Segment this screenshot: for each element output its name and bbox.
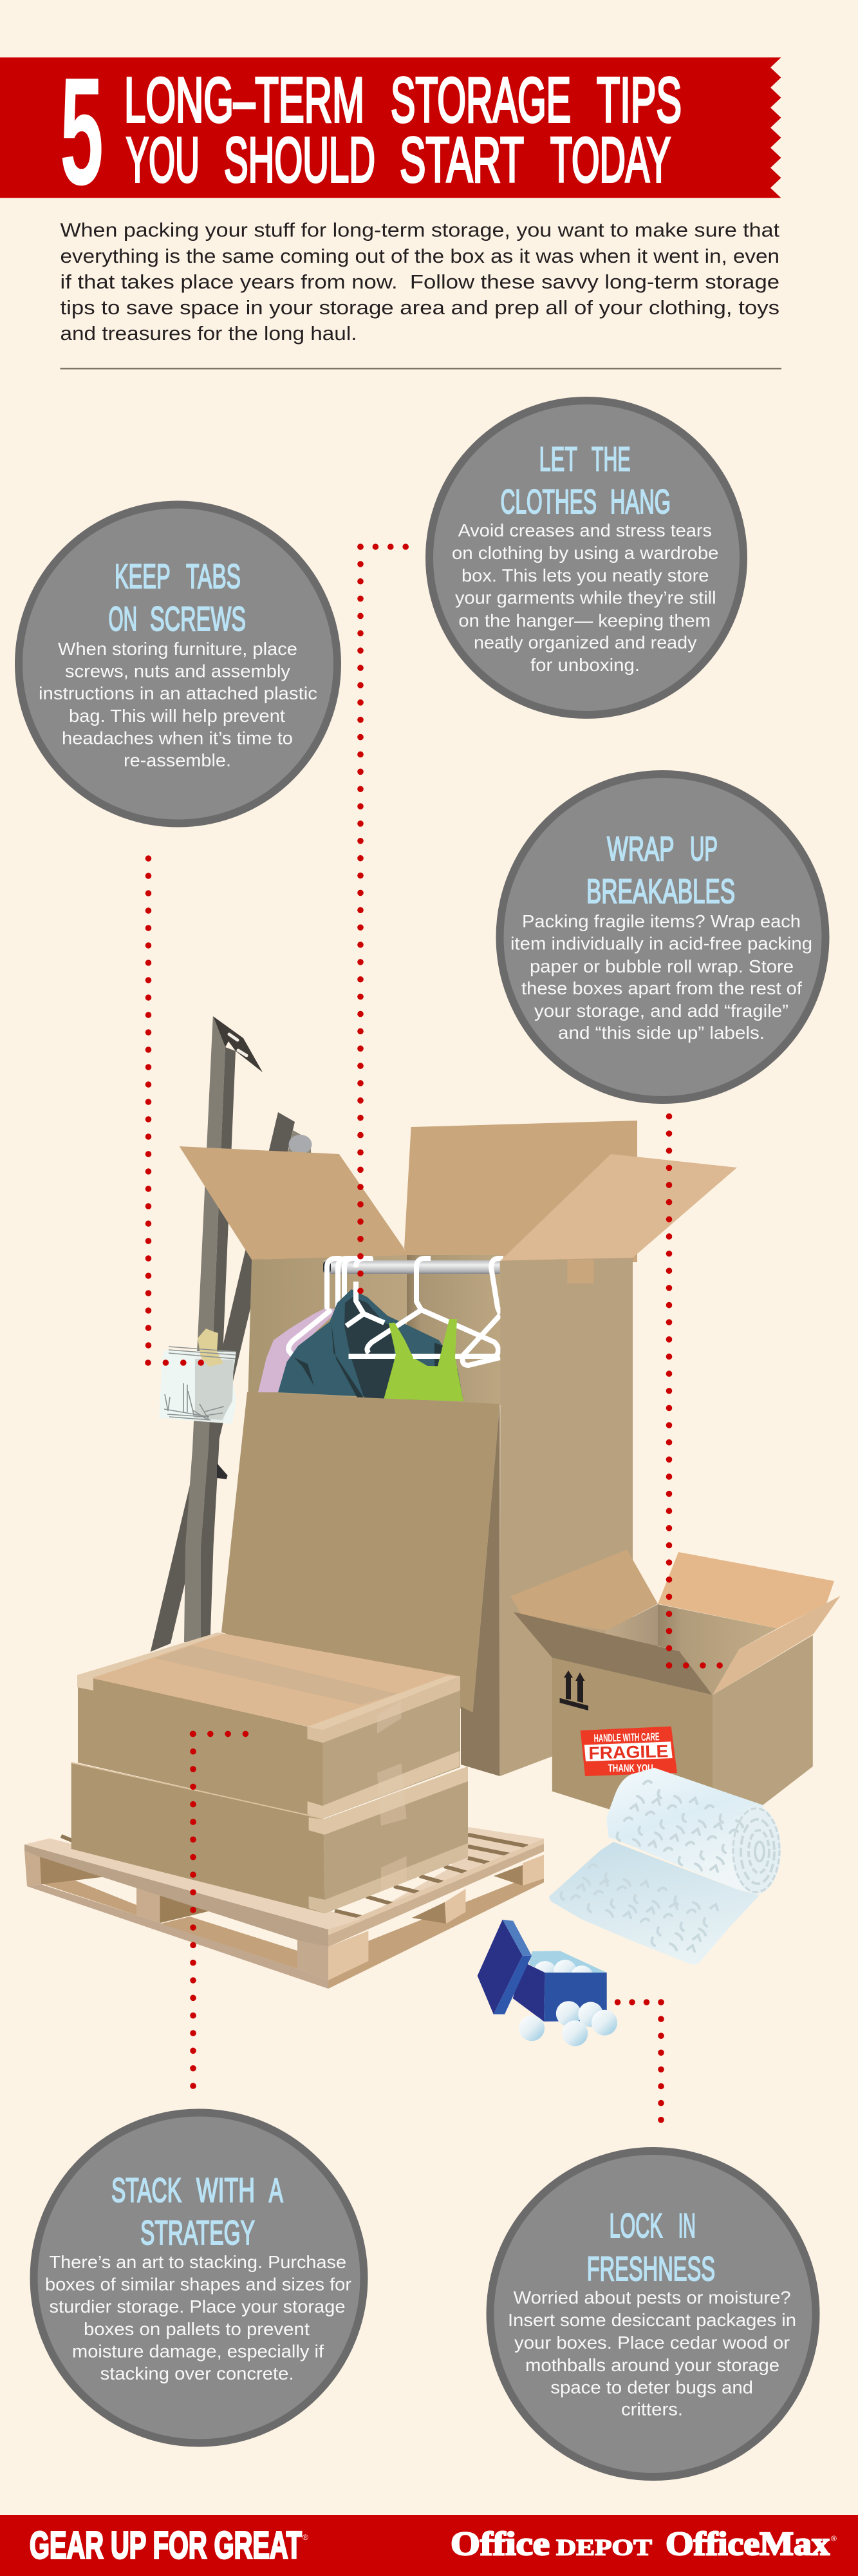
dotted connector: keep tabs to screws bag <box>148 858 201 1363</box>
upper box top face <box>78 1633 460 1730</box>
heading: wrap up breakables <box>586 830 735 911</box>
dotted connector: stacking to boxes <box>193 1734 246 2087</box>
body: let the clothes hang: for unboxing. <box>530 655 640 675</box>
deck grooves <box>61 1835 528 1918</box>
tagline: GEAR UP FOR GREAT <box>30 2524 302 2567</box>
left back flap <box>510 1549 658 1631</box>
heading: wrap up breakables: UP <box>690 830 718 868</box>
body: stack with a strategy: boxes of similar shapes and sizes for <box>45 2275 351 2294</box>
jacket shadow folds <box>294 1323 444 1399</box>
box left face <box>513 1962 545 2022</box>
heading: let the clothes hang: HANG <box>610 483 671 521</box>
vertical side tape <box>377 1701 407 1891</box>
heading: wrap up breakables: WRAP <box>607 830 675 868</box>
top right edge tape <box>308 1676 460 1730</box>
body: lock in freshness: critters. <box>621 2400 683 2419</box>
heading: keep tabs on screws: ON <box>108 600 137 638</box>
clothes rail <box>323 1260 500 1274</box>
lower box top tape <box>309 1766 468 1835</box>
panel: wrap up breakables <box>499 774 825 1100</box>
blocks <box>24 1851 41 1886</box>
loose mothballs <box>519 2001 617 2046</box>
upper box lower tape <box>308 1751 460 1819</box>
body: lock in freshness <box>508 2287 796 2419</box>
front hanger bar over top <box>413 1354 439 1359</box>
tagline registered mark: ® <box>303 2533 308 2542</box>
intro paragraph: and treasures for the long haul. <box>61 322 357 345</box>
teal jacket <box>278 1289 463 1401</box>
top plank surface <box>24 1838 360 1929</box>
lower box front <box>71 1763 325 1913</box>
tape piece <box>198 1329 223 1367</box>
heading: stack with a strategy: STRATEGY <box>140 2214 255 2252</box>
bubble pattern on sheet <box>561 1864 718 1951</box>
unrolled sheet <box>549 1842 760 1965</box>
body: wrap up breakables: your storage, and add “fragile” <box>534 1001 788 1021</box>
roll end spiral <box>733 1808 779 1892</box>
bag shaded side <box>195 1359 234 1420</box>
right plank edge <box>328 1844 544 1947</box>
title numeral: 5 <box>60 46 104 217</box>
right flap <box>501 1154 737 1261</box>
body: stack with a strategy: stacking over concrete. <box>100 2363 294 2383</box>
footer band <box>0 2515 858 2576</box>
fragile label <box>581 1727 677 1776</box>
body: lock in freshness: mothballs around your storage <box>525 2355 779 2375</box>
lid large face <box>478 1920 523 2014</box>
heading: lock in freshness: LOCK <box>610 2207 663 2245</box>
back flap <box>404 1121 637 1262</box>
rail: upright dark face <box>201 1047 236 1642</box>
top plank front <box>24 1844 328 1947</box>
box seam highlight <box>71 1763 323 1819</box>
illustration: bubble wrap roll <box>549 1768 781 1965</box>
body: wrap up breakables <box>510 911 812 1043</box>
illustration: stacked boxes <box>71 1633 468 1913</box>
right face <box>713 1635 813 1805</box>
rail: diagonal stick <box>151 1112 295 1652</box>
third hanger <box>463 1258 503 1365</box>
pallet right deck <box>328 1827 544 1947</box>
body: stack with a strategy: There’s an art to stacking. Purchase <box>49 2252 346 2272</box>
inside of box <box>529 1951 607 1973</box>
heading: wrap up breakables: BREAKABLES <box>586 873 735 911</box>
top tape band <box>154 1645 397 1705</box>
dotted connector: clothes hang to wardrobe <box>360 547 406 1291</box>
lid side edge <box>494 1956 532 2014</box>
heading: stack with a strategy <box>111 2172 283 2252</box>
left flap <box>180 1146 408 1260</box>
body: stack with a strategy <box>45 2252 351 2383</box>
body: stack with a strategy: boxes on pallets to prevent <box>84 2319 310 2339</box>
upper box front <box>78 1675 323 1819</box>
illustration: mothball box <box>478 1920 617 2046</box>
body: keep tabs on screws: bag. This will help prevent <box>69 706 285 726</box>
body: let the clothes hang <box>452 520 718 675</box>
inner right wall <box>407 1255 501 1405</box>
body: stack with a strategy: sturdier storage. Place your storage <box>49 2297 345 2316</box>
intro paragraph: everything is the same coming out of the box as it was when it went in, even <box>61 245 779 267</box>
body: lock in freshness: Worried about pests or moisture? <box>514 2287 791 2307</box>
jacket inner dark <box>344 1297 395 1399</box>
illustration: plastic bag with screws <box>159 1329 236 1424</box>
roll end <box>732 1806 781 1894</box>
open rails <box>41 1879 136 1915</box>
panel: keep tabs on screws <box>19 505 337 823</box>
body: keep tabs on screws: screws, nuts and assembly <box>65 661 290 681</box>
body: wrap up breakables: Packing fragile items? Wrap each <box>522 911 801 931</box>
bottom right board <box>328 1871 544 1989</box>
body: keep tabs on screws: instructions in an attached plastic <box>39 683 317 703</box>
illustration: wardrobe box <box>180 1121 737 1776</box>
heading: let the clothes hang <box>501 440 671 521</box>
title line one: STORAGE <box>391 64 571 135</box>
inner left wall <box>248 1255 407 1404</box>
rail bracket <box>213 1016 263 1072</box>
front face <box>552 1658 713 1842</box>
panel: lock in freshness <box>490 2151 816 2477</box>
rail: upright light face <box>184 1016 225 1642</box>
right plank top strip <box>328 1839 544 1935</box>
side shadow <box>461 1404 499 1776</box>
body: let the clothes hang: on the hanger— keeping them <box>458 611 711 630</box>
dotted connector: freshness to mothballs <box>618 2002 662 2120</box>
panel: stack with a strategy <box>33 2112 364 2443</box>
lower box side <box>323 1766 468 1913</box>
body: stack with a strategy: moisture damage, especially if <box>72 2342 324 2361</box>
title line two <box>126 124 671 195</box>
top left edge tape <box>77 1633 223 1690</box>
heading: stack with a strategy: WITH <box>196 2172 255 2210</box>
body: lock in freshness: space to deter bugs and <box>550 2378 753 2397</box>
body: keep tabs on screws <box>39 639 317 770</box>
hanger on jacket <box>346 1258 384 1326</box>
title line one: LONG–TERM <box>124 64 364 135</box>
balls inside box <box>534 1960 592 1973</box>
intro paragraph: When packing your stuff for long-term storage, you want to make sure that <box>61 219 779 241</box>
box front face <box>544 1973 607 2022</box>
heading: lock in freshness <box>587 2207 715 2288</box>
body: keep tabs on screws: headaches when it’s time to <box>62 728 293 748</box>
heading: lock in freshness: FRESHNESS <box>587 2250 715 2288</box>
right back flap <box>658 1552 834 1629</box>
office depot logo: Office <box>451 2526 550 2562</box>
heading: let the clothes hang: LET <box>539 440 577 478</box>
inner left wall <box>606 1604 658 1649</box>
right face <box>500 1258 633 1776</box>
right front flap <box>713 1596 841 1695</box>
groove end tabs <box>366 1846 527 1924</box>
fragile label: HANDLE WITH CARE <box>593 1730 660 1745</box>
zip lines <box>169 1347 236 1359</box>
right inner blocks <box>412 1855 544 1924</box>
front flap dark <box>514 1612 713 1695</box>
body: let the clothes hang: Avoid creases and stress tears <box>458 520 712 540</box>
bracket foot <box>217 1463 228 1479</box>
lilac shirt <box>258 1307 339 1392</box>
lower box bottom tape <box>309 1843 468 1913</box>
lid top edge <box>503 1920 532 1956</box>
body: wrap up breakables: and “this side up” labels. <box>558 1023 765 1043</box>
bag body <box>159 1350 236 1424</box>
fragile label: FRAGILE <box>588 1741 669 1763</box>
screws <box>164 1383 224 1420</box>
heading: keep tabs on screws: SCREWS <box>150 600 246 638</box>
bracket slots <box>229 1034 247 1056</box>
body: lock in freshness: Insert some desiccant packages in <box>508 2310 796 2330</box>
inner right wall <box>658 1604 778 1695</box>
body: let the clothes hang: on clothing by using a wardrobe <box>452 543 718 563</box>
body: wrap up breakables: these boxes apart from the rest of <box>521 978 802 998</box>
body: keep tabs on screws: When storing furniture, place <box>58 639 297 659</box>
fragile label: THANK YOU <box>608 1762 653 1774</box>
body: keep tabs on screws: re-assemble. <box>124 750 231 770</box>
heading: stack with a strategy: A <box>269 2172 283 2210</box>
title line one: TIPS <box>597 64 682 135</box>
body: wrap up breakables: item individually in acid-free packing <box>510 934 812 953</box>
officemax registered mark: ® <box>831 2534 837 2543</box>
intro paragraph: if that takes place years from now. Follow these savvy long-term storage <box>61 270 779 293</box>
shadow triangles <box>39 1857 112 1884</box>
body: let the clothes hang: your garments while they’re still <box>455 587 716 608</box>
second hanger <box>349 1258 499 1358</box>
intro paragraph: tips to save space in your storage area and prep all of your clothing, toys <box>61 296 779 319</box>
office depot logo: DEPOT <box>556 2535 652 2561</box>
illustration: fragile box <box>510 1549 841 1842</box>
title line two: START <box>400 124 524 195</box>
bottom plank under left side <box>27 1884 328 1989</box>
illustration: bed frame rails <box>151 1016 312 1652</box>
heading: keep tabs on screws <box>108 558 246 638</box>
title line two: YOU <box>126 124 200 195</box>
heading: let the clothes hang: CLOTHES <box>501 483 597 521</box>
foam roll end <box>286 1130 312 1159</box>
officemax logo: OfficeMax <box>666 2526 830 2562</box>
title banner <box>0 46 781 217</box>
banner ribbon <box>0 57 781 198</box>
heading: keep tabs on screws: TABS <box>186 558 241 596</box>
green tank top <box>384 1319 463 1401</box>
tape tab <box>567 1260 593 1283</box>
body: wrap up breakables: paper or bubble roll wrap. Store <box>530 956 794 976</box>
title line two: TODAY <box>550 124 671 195</box>
body: lock in freshness: your boxes. Place cedar wood or <box>514 2333 790 2353</box>
body: let the clothes hang: neatly organized and ready <box>474 632 696 652</box>
bubble pattern on roll <box>617 1781 743 1871</box>
upper box side <box>323 1690 460 1819</box>
office depot logo <box>451 2526 652 2562</box>
title line two: SHOULD <box>224 124 375 195</box>
intro paragraph <box>61 219 779 345</box>
heading: let the clothes hang: THE <box>592 440 631 478</box>
dotted connector: breakables to fragile box <box>669 1117 720 1666</box>
body: let the clothes hang: box. This lets you neatly store <box>462 565 709 585</box>
white hangers behind jacket <box>288 1258 357 1355</box>
this way up icon <box>560 1671 588 1710</box>
heading: keep tabs on screws: KEEP <box>115 558 171 596</box>
heading: stack with a strategy: STACK <box>111 2172 182 2210</box>
front panel <box>221 1392 499 1712</box>
roll body <box>606 1768 763 1893</box>
dark green lining <box>391 1321 454 1375</box>
heading: lock in freshness: IN <box>678 2207 696 2245</box>
illustration: pallet <box>24 1827 544 1989</box>
panel: let the clothes hang <box>429 401 743 715</box>
